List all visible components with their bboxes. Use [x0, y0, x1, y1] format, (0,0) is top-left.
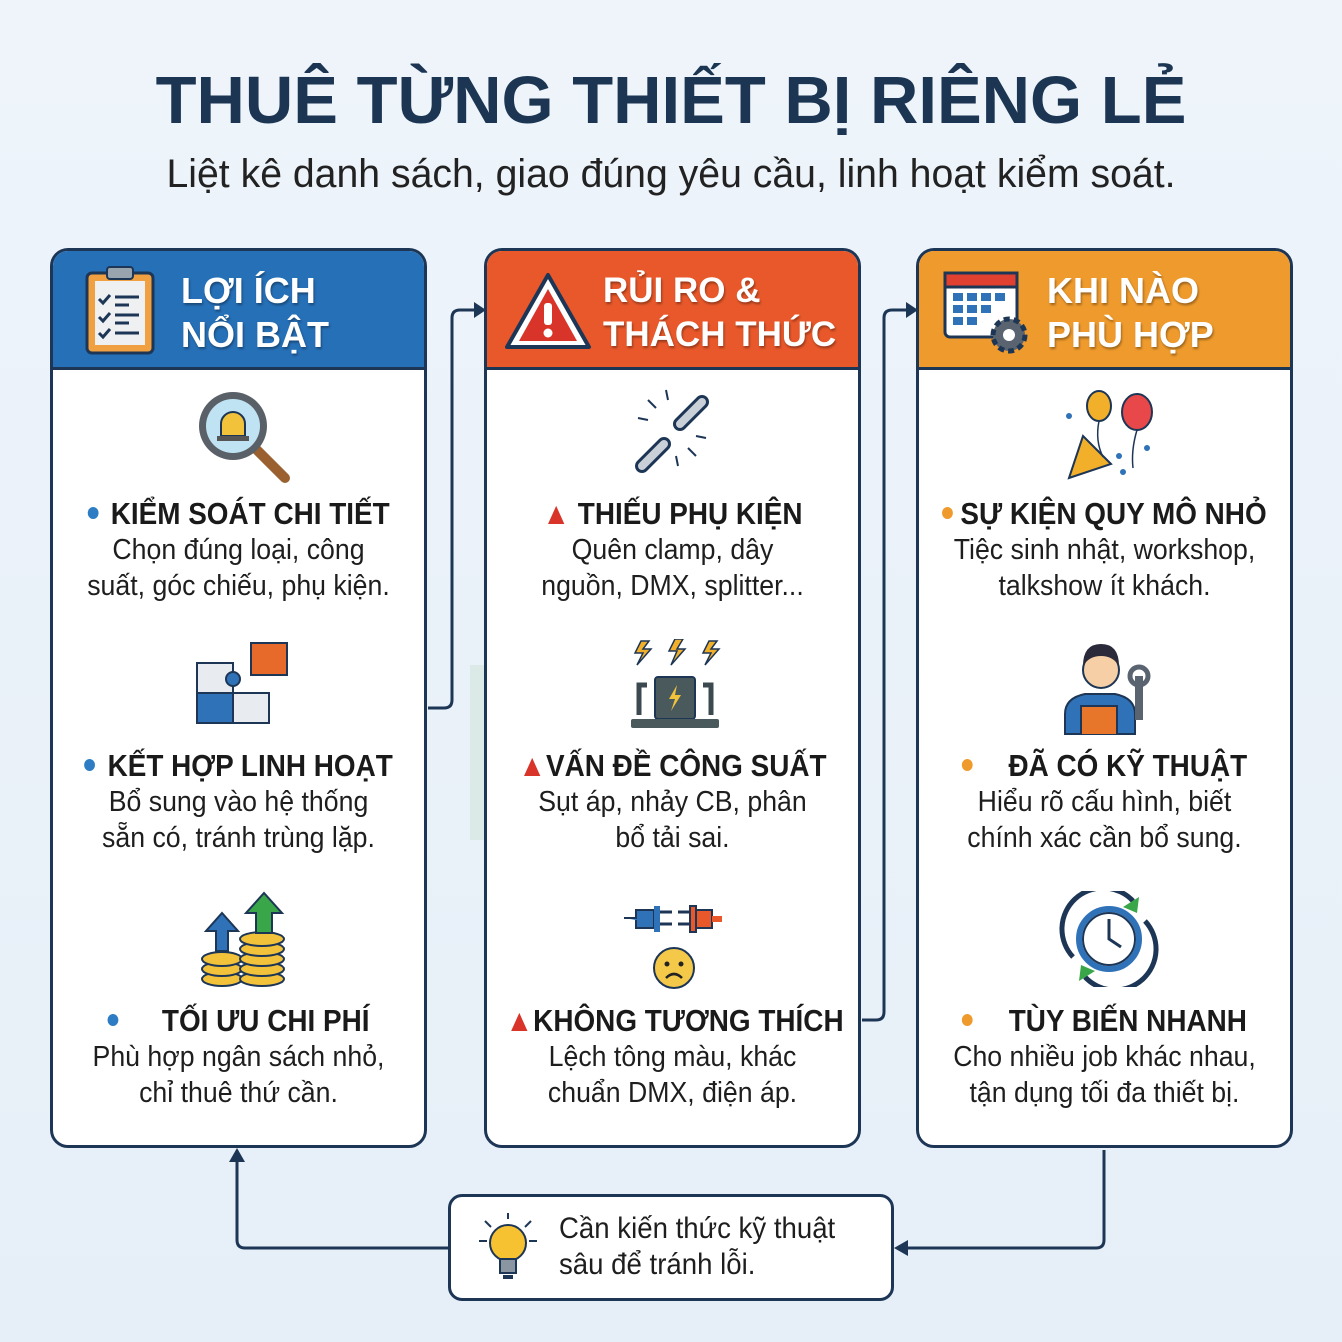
text: callout — [559, 1212, 835, 1281]
item: thieu phu kien: nguồn, DMX, splitter... — [541, 570, 804, 602]
item: kiem soat: suất, góc chiếu, phụ kiện. — [87, 570, 390, 602]
header: risks: RỦI RO & — [603, 271, 760, 310]
icon: magnifier — [199, 392, 290, 483]
item: khong tuong thich — [506, 1003, 844, 1109]
item: su kien: talkshow ít khách. — [998, 570, 1211, 602]
item: toi uu: TỐI ƯU CHI PHÍ — [162, 1003, 370, 1038]
item: cong suat: ▲VẤN ĐỀ CÔNG SUẤT — [518, 748, 827, 783]
item: tuy bien: tận dụng tối đa thiết bị. — [970, 1077, 1239, 1109]
callout: knowledge — [448, 1194, 894, 1301]
icon: clock — [1059, 891, 1159, 987]
text: callout: sâu để tránh lỗi. — [559, 1248, 755, 1281]
watermark — [470, 665, 858, 840]
panel: benefits — [50, 248, 427, 1148]
panel: when suitable — [916, 248, 1293, 1148]
item: thieu phu kien: ▲ THIẾU PHỤ KIỆN — [542, 496, 803, 531]
item: ket hop: Bổ sung vào hệ thống — [109, 786, 368, 818]
item: khong tuong thich: chuẩn DMX, điện áp. — [548, 1077, 797, 1109]
item: da co ky thuat: ĐÃ CÓ KỸ THUẬT — [1008, 748, 1247, 783]
icon: technician — [1064, 644, 1150, 735]
item: thieu phu kien: Quên clamp, dây — [572, 534, 773, 566]
item: ket hop: sẵn có, tránh trùng lặp. — [102, 822, 375, 854]
icon: power — [631, 639, 721, 728]
item: cong suat — [518, 748, 827, 854]
item: tuy bien — [953, 1003, 1256, 1109]
item: su kien — [942, 496, 1267, 602]
item: cong suat: bổ tải sai. — [615, 822, 730, 854]
item: ket hop: KẾT HỢP LINH HOẠT — [108, 748, 393, 783]
item: kiem soat: Chọn đúng loại, công — [112, 534, 365, 566]
item: tuy bien: TÙY BIẾN NHANH — [1009, 1003, 1247, 1038]
text: callout: Cần kiến thức kỹ thuật — [559, 1212, 835, 1245]
header: benefits — [53, 251, 424, 370]
item: toi uu — [93, 1003, 384, 1109]
item: khong tuong thich: Lệch tông màu, khác — [549, 1041, 796, 1073]
item: su kien: SỰ KIỆN QUY MÔ NHỎ — [960, 496, 1267, 531]
icon: bulb — [479, 1213, 537, 1279]
item: kiem soat — [87, 496, 390, 602]
item: toi uu: Phù hợp ngân sách nhỏ, — [93, 1041, 384, 1073]
panel: risks — [484, 248, 861, 1148]
header: suitable: KHI NÀO — [1047, 270, 1199, 311]
item: da co ky thuat: Hiểu rõ cấu hình, biết — [978, 786, 1231, 818]
item: cong suat: Sụt áp, nhảy CB, phân — [538, 786, 807, 818]
icon: broken chain — [635, 390, 709, 473]
icon: puzzle — [196, 642, 288, 724]
icon: coins — [201, 892, 285, 987]
header: benefits: NỔI BẬT — [181, 314, 329, 355]
subtitle: Liệt kê danh sách, giao đúng yêu cầu, linh hoạt kiểm soát. — [166, 152, 1175, 196]
item: toi uu: chỉ thuê thứ cần. — [139, 1077, 338, 1109]
header: suitable: PHÙ HỢP — [1047, 314, 1214, 355]
item: tuy bien: Cho nhiều job khác nhau, — [953, 1041, 1256, 1073]
item: ket hop — [84, 748, 393, 854]
item: su kien: Tiệc sinh nhật, workshop, — [954, 534, 1255, 566]
header: benefits: LỢI ÍCH — [181, 270, 316, 311]
item: kiem soat: KIỂM SOÁT CHI TIẾT — [111, 496, 390, 531]
header: suitable — [919, 251, 1290, 370]
header: risks: THÁCH THỨC — [603, 315, 836, 354]
icon: party — [1066, 390, 1153, 480]
item: thieu phu kien — [541, 496, 804, 602]
item: da co ky thuat: chính xác cần bổ sung. — [967, 822, 1242, 854]
title: THUÊ TỪNG THIẾT BỊ RIÊNG LẺ — [156, 63, 1186, 138]
header: risks — [487, 251, 858, 370]
item: khong tuong thich: ▲KHÔNG TƯƠNG THÍCH — [506, 1003, 844, 1038]
item: da co ky thuat — [962, 748, 1247, 854]
icon: plugs sad — [624, 905, 722, 989]
